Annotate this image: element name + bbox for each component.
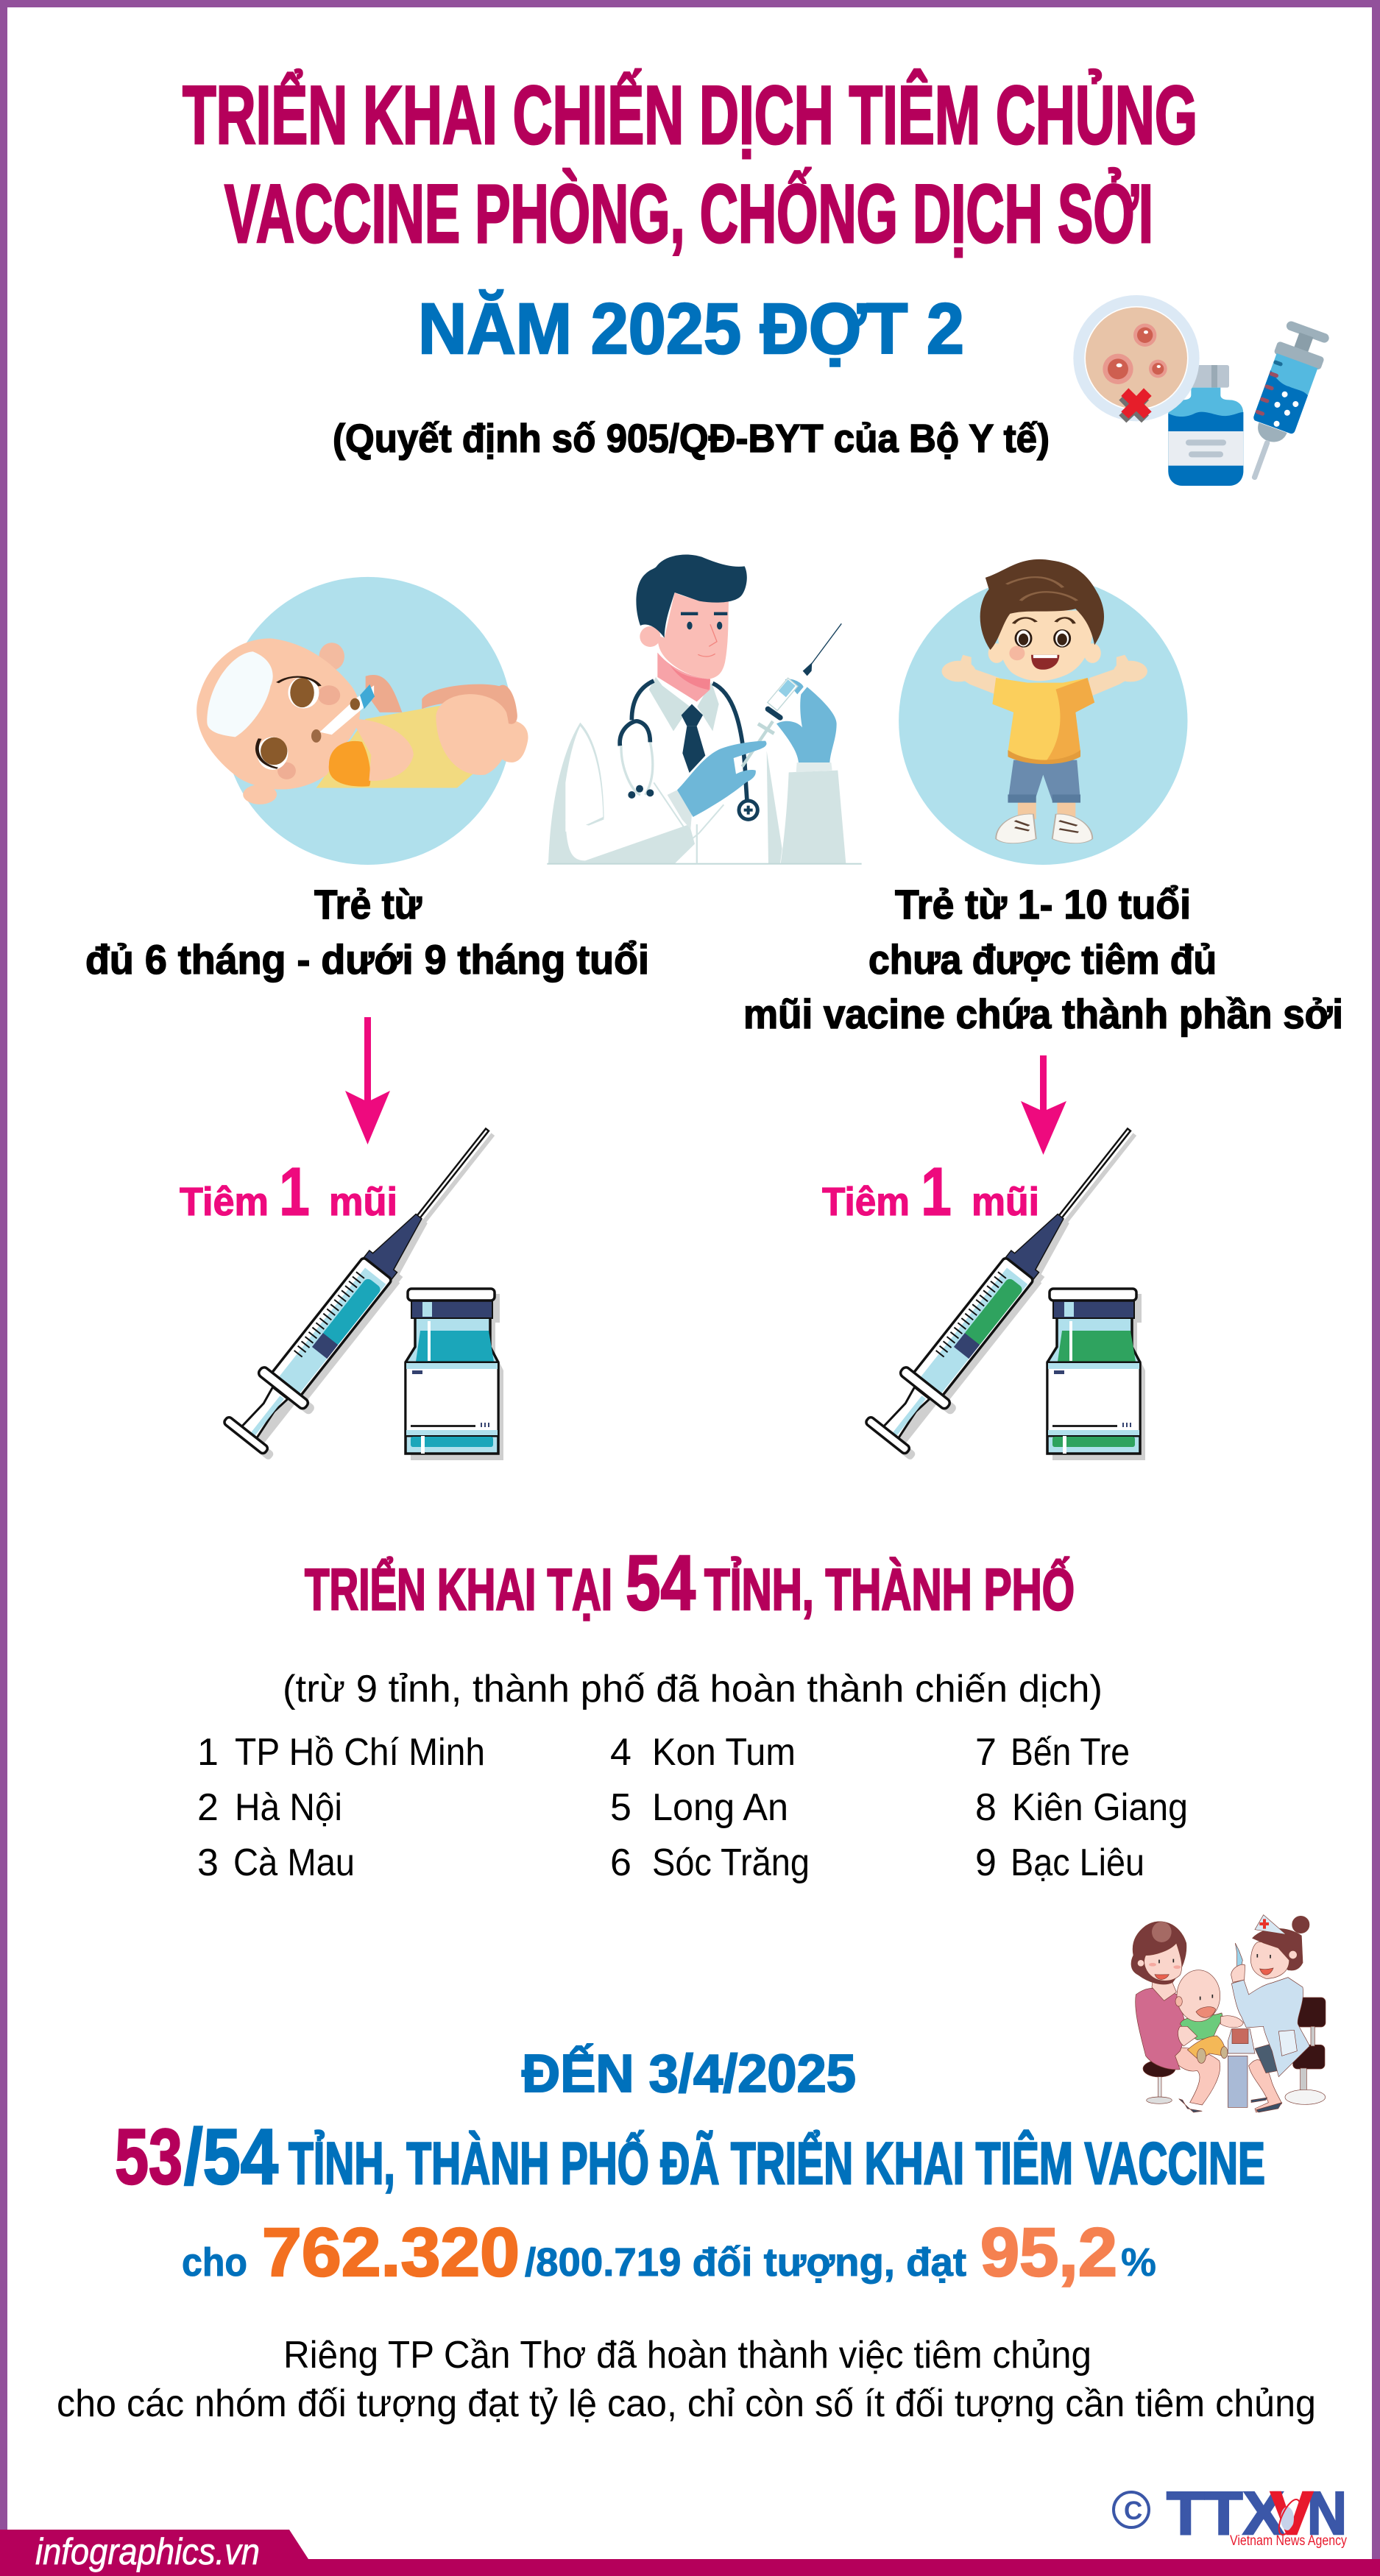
logo: TTXVN: V xyxy=(1270,2479,1313,2547)
list: nine completed provinces: TP Hồ Chí Minh xyxy=(235,1731,485,1774)
arrow: left xyxy=(345,1017,390,1144)
heading: 54 provinces: TRIỂN KHAI TẠI xyxy=(305,1557,612,1622)
list: nine completed provinces: 5 xyxy=(610,1786,631,1829)
list: nine completed provinces: 2 xyxy=(197,1786,219,1829)
list: nine completed provinces: 4 xyxy=(610,1731,631,1774)
logo: TTXVN: C xyxy=(1124,2497,1142,2525)
icon: syringe and vial, green xyxy=(861,1111,1158,1463)
note: Can Tho: Riêng TP Cần Thơ đã hoàn thành việc tiêm chủng xyxy=(283,2334,1091,2377)
logo: TTXVN xyxy=(1114,2479,1347,2549)
list: nine completed provinces: Kon Tum xyxy=(652,1731,796,1774)
dose label: left xyxy=(180,1153,397,1230)
statistic: people vaccinated: /800.719 đối tượng, đạt xyxy=(525,2240,966,2285)
list: nine completed provinces: 9 xyxy=(975,1841,997,1884)
note: Can Tho: cho các nhóm đối tượng đạt tỷ lệ cao, chỉ còn số ít đối tượng cần tiêm chủng xyxy=(57,2382,1316,2425)
note: Can Tho xyxy=(57,2334,1316,2425)
heading: 54 provinces: 54 xyxy=(626,1540,696,1627)
decision reference: (Quyết định số 905/QĐ-BYT của Bộ Y tế) xyxy=(333,417,1050,461)
icon: doctor with syringe xyxy=(547,554,862,865)
label: younger group: đủ 6 tháng - dưới 9 tháng tuổi xyxy=(85,936,649,983)
list: nine completed provinces xyxy=(197,1731,1188,1884)
note: nine provinces excluded: (trừ 9 tỉnh, thành phố đã hoàn thành chiến dịch) xyxy=(283,1668,1103,1710)
statistic: people vaccinated: 762.320 xyxy=(262,2214,520,2290)
label: older group: Trẻ từ 1- 10 tuổi xyxy=(895,881,1191,927)
list: nine completed provinces: Hà Nội xyxy=(235,1786,342,1829)
panel: baby group illustration xyxy=(197,577,528,865)
statistic: people vaccinated: % xyxy=(1121,2240,1156,2285)
statistic: people vaccinated: 95,2 xyxy=(980,2214,1117,2290)
logo: TTXVN: Vietnam News Agency xyxy=(1230,2533,1347,2549)
label: older group: mũi vacine chứa thành phần sởi xyxy=(743,991,1343,1037)
list: nine completed provinces: 3 xyxy=(197,1841,219,1884)
baby xyxy=(1175,1970,1243,2063)
mother xyxy=(1131,1922,1220,2112)
icon: measles skin, vaccine bottle and syringe xyxy=(1073,295,1333,488)
list: nine completed provinces: Kiên Giang xyxy=(1012,1786,1188,1829)
table xyxy=(1228,2029,1255,2107)
dose label: right: mũi xyxy=(972,1180,1039,1224)
list: nine completed provinces: 6 xyxy=(610,1841,631,1884)
icon: syringe and vial, teal xyxy=(219,1111,517,1463)
list: nine completed provinces: 7 xyxy=(975,1731,997,1774)
footer site name: infographics.vn xyxy=(35,2531,260,2572)
panel: child group illustration xyxy=(899,559,1187,865)
heading: 54 provinces xyxy=(305,1540,1075,1627)
icon: sick baby xyxy=(197,638,528,804)
label: older group xyxy=(743,881,1343,1037)
icon: red cross mark xyxy=(1119,388,1152,422)
icon: skin lesions xyxy=(1073,295,1200,421)
label: younger group xyxy=(85,881,649,983)
date heading: ĐẾN 3/4/2025 xyxy=(522,2044,856,2103)
subtitle: year and round: NĂM 2025 ĐỢT 2 xyxy=(418,289,964,369)
dose label: left: mũi xyxy=(329,1180,397,1224)
label: younger group: Trẻ từ xyxy=(314,881,422,927)
nurse xyxy=(1231,1915,1309,2112)
dose label: right xyxy=(822,1153,1039,1230)
dose label: right: Tiêm xyxy=(822,1180,910,1224)
dose label: left: Tiêm xyxy=(180,1180,269,1224)
list: nine completed provinces: 1 xyxy=(197,1731,219,1774)
stools xyxy=(1143,1998,1326,2104)
icon: mother, baby and nurse xyxy=(1131,1915,1326,2112)
heading: 54 provinces: TỈNH, THÀNH PHỐ xyxy=(704,1557,1075,1622)
background circle xyxy=(899,577,1187,865)
icon: syringe xyxy=(1231,319,1333,488)
statistic: people vaccinated: cho xyxy=(182,2240,247,2285)
list: nine completed provinces: Bạc Liêu xyxy=(1011,1841,1144,1884)
title xyxy=(183,69,1197,260)
icon: happy boy xyxy=(941,559,1147,843)
dose label: right: 1 xyxy=(921,1153,952,1230)
label: older group: chưa được tiêm đủ xyxy=(868,936,1217,983)
statistic: 53 of 54 provinces xyxy=(115,2112,1265,2201)
logo: TTXVN: N xyxy=(1307,2479,1347,2547)
statistic: 53 of 54 provinces: /54 xyxy=(184,2112,278,2201)
list: nine completed provinces: Bến Tre xyxy=(1011,1731,1130,1774)
list: nine completed provinces: Sóc Trăng xyxy=(652,1841,810,1884)
statistic: people vaccinated xyxy=(182,2214,1156,2290)
statistic: 53 of 54 provinces: 53 xyxy=(115,2112,183,2201)
arrow: right xyxy=(1021,1055,1066,1155)
logo: TTXVN: TTX xyxy=(1167,2479,1284,2547)
list: nine completed provinces: Long An xyxy=(652,1786,788,1829)
footer banner xyxy=(0,2530,1380,2576)
list: nine completed provinces: Cà Mau xyxy=(233,1841,355,1884)
list: nine completed provinces: 8 xyxy=(975,1786,997,1829)
icon: bottle xyxy=(1168,365,1243,486)
background circle xyxy=(223,577,512,865)
dose label: left: 1 xyxy=(279,1153,310,1230)
